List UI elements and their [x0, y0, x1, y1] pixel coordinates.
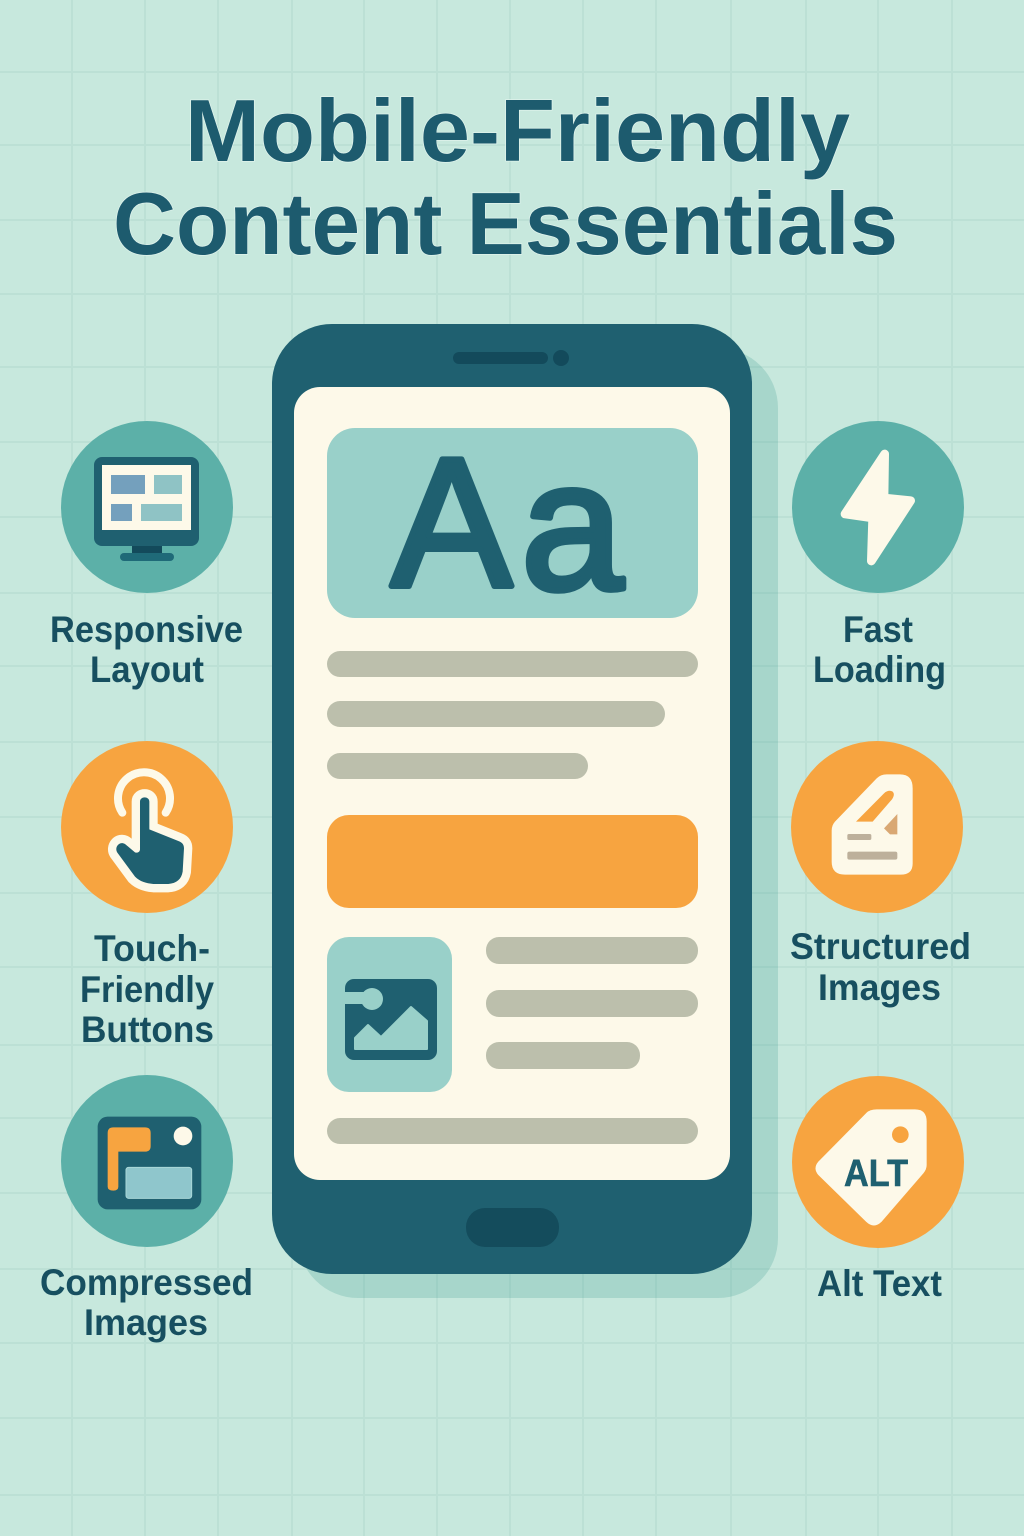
label: Fast Loading: Loading — [813, 649, 946, 690]
icon: tapping hand — [61, 741, 233, 913]
label: Structured Images: Images — [818, 967, 941, 1008]
item: compressed images — [40, 1075, 253, 1343]
icon: structured document — [791, 741, 963, 913]
label: Touch-Friendly Buttons: Touch- — [94, 928, 210, 969]
hero typography panel: A — [391, 419, 512, 625]
label: Touch-Friendly Buttons: Buttons — [81, 1009, 214, 1050]
label: Fast Loading — [813, 609, 946, 690]
speaker and camera — [453, 350, 569, 366]
phone screen — [294, 387, 730, 1180]
bottom text line — [327, 1118, 698, 1144]
hero typography panel: a — [521, 422, 624, 628]
title: Mobile-Friendly — [185, 81, 850, 180]
label: Responsive Layout — [50, 609, 243, 690]
home button — [466, 1208, 559, 1247]
label: Structured Images: Structured — [790, 926, 971, 967]
title: Content Essentials — [113, 174, 898, 273]
text lines — [327, 651, 698, 779]
label: Touch-Friendly Buttons — [80, 928, 214, 1050]
item: fast loading — [792, 421, 964, 690]
label: Responsive Layout: Layout — [90, 649, 204, 690]
item: responsive layout — [50, 421, 243, 690]
image thumbnail — [327, 937, 452, 1092]
side text lines — [486, 937, 698, 1069]
icon: compressed picture — [61, 1075, 233, 1247]
label: Alt Text: Alt Text — [817, 1263, 942, 1304]
hero typography panel — [327, 419, 698, 628]
icon: ALT tag — [792, 1076, 964, 1248]
label: Structured Images — [790, 926, 971, 1008]
icon: monitor — [61, 421, 233, 593]
label: Compressed Images: Images — [84, 1302, 208, 1343]
icon: lightning bolt — [792, 421, 964, 593]
orange call-to-action button — [327, 815, 698, 908]
phone body — [272, 324, 752, 1274]
label: Compressed Images — [40, 1262, 253, 1343]
label: Compressed Images: Compressed — [40, 1262, 253, 1303]
title — [113, 81, 898, 273]
label: Responsive Layout: Responsive — [50, 609, 243, 650]
label: Fast Loading: Fast — [843, 609, 913, 650]
phone shadow — [298, 348, 778, 1298]
item: alt text — [792, 1076, 964, 1304]
label: Touch-Friendly Buttons: Friendly — [80, 969, 214, 1010]
phone illustration — [272, 324, 778, 1298]
item: touch-friendly buttons — [61, 741, 233, 1050]
item: structured images — [790, 741, 971, 1008]
icon: ALT tag: ALT — [844, 1153, 908, 1195]
